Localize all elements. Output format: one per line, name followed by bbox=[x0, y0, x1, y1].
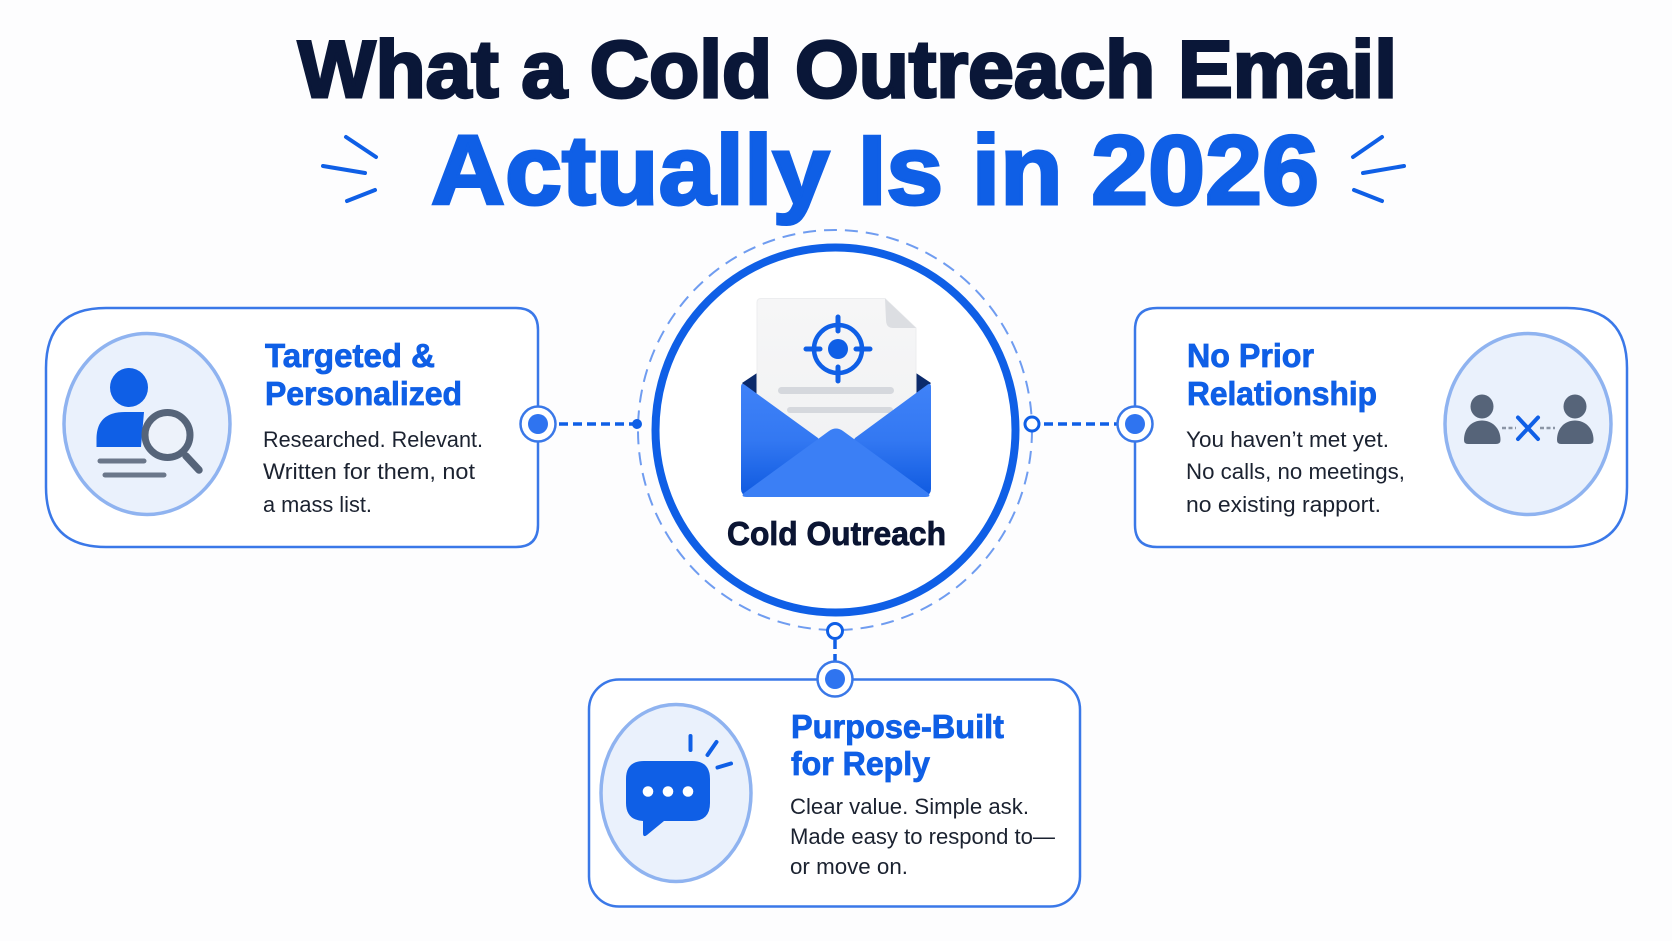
card outline bbox=[46, 308, 538, 547]
body text: Clear value. Simple ask. bbox=[790, 794, 1029, 819]
letter paper bbox=[757, 298, 916, 445]
heading: Personalized bbox=[265, 375, 462, 412]
heading bbox=[265, 337, 462, 412]
title line 1: What a Cold Outreach Email bbox=[298, 25, 1397, 115]
connector node bbox=[520, 406, 556, 442]
body text: Researched. Relevant. bbox=[263, 427, 483, 452]
paper fold bbox=[885, 298, 916, 328]
heading bbox=[791, 708, 1004, 782]
icon: speech bubble bbox=[601, 704, 751, 882]
body text bbox=[790, 794, 1055, 879]
heading: No Prior bbox=[1187, 337, 1314, 374]
solid ring bbox=[656, 248, 1016, 612]
paper lines bbox=[778, 387, 894, 394]
heading: for Reply bbox=[791, 745, 931, 782]
heading bbox=[1187, 337, 1377, 412]
body text: no existing rapport. bbox=[1186, 492, 1381, 517]
panel: targeted and personalized bbox=[46, 308, 556, 547]
icon: envelope with target letter bbox=[741, 298, 931, 497]
envelope right panel bbox=[836, 384, 931, 496]
panel: purpose-built for reply bbox=[589, 662, 1080, 906]
body text: You haven’t met yet. bbox=[1186, 427, 1389, 452]
connector: left bbox=[559, 419, 642, 429]
body text bbox=[263, 427, 483, 517]
card outline bbox=[1135, 308, 1627, 547]
icon: left accent sparks bbox=[323, 137, 376, 201]
body text: a mass list. bbox=[263, 492, 372, 517]
envelope left panel bbox=[741, 384, 836, 496]
central label: Cold Outreach bbox=[727, 515, 946, 552]
connector node bbox=[818, 662, 852, 696]
body text: or move on. bbox=[790, 854, 908, 879]
connector: right bbox=[1025, 417, 1118, 431]
heading: Relationship bbox=[1187, 375, 1377, 412]
connector: bottom bbox=[828, 624, 842, 662]
title bbox=[298, 25, 1397, 225]
heading: Targeted & bbox=[265, 337, 435, 374]
body text: Written for them, not bbox=[263, 459, 475, 484]
connector node bbox=[1118, 406, 1152, 442]
dashed outer ring bbox=[638, 230, 1032, 630]
icon: two people with a cross bbox=[1445, 334, 1611, 514]
body text bbox=[1186, 427, 1405, 517]
heading: Purpose-Built bbox=[791, 708, 1004, 745]
card outline bbox=[589, 680, 1080, 906]
central hub: cold outreach bbox=[638, 230, 1032, 630]
envelope front flap bbox=[743, 428, 929, 497]
icon: target bbox=[806, 317, 870, 381]
body text: No calls, no meetings, bbox=[1186, 459, 1405, 484]
title line 2: Actually Is in 2026 bbox=[431, 115, 1319, 225]
body text: Made easy to respond to— bbox=[790, 824, 1055, 849]
panel: no prior relationship bbox=[1118, 308, 1627, 547]
icon: right accent sparks bbox=[1353, 137, 1404, 201]
icon: person with magnifier bbox=[64, 334, 230, 514]
envelope back corners bbox=[742, 373, 931, 400]
